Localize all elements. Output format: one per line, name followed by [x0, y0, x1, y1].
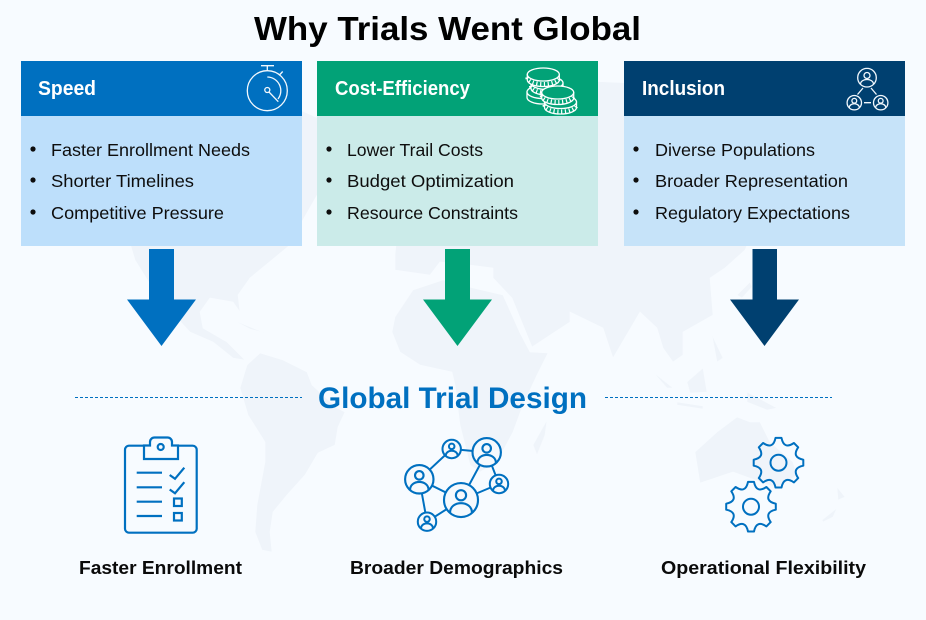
panel: speed: Competitive Pressure	[51, 203, 224, 223]
panel: inclusion: Diverse Populations	[655, 140, 815, 160]
panel: speed: Faster Enrollment Needs	[51, 140, 250, 160]
panel: cost-efficiency	[317, 61, 598, 246]
icon: people network	[405, 438, 508, 531]
panel: speed: Shorter Timelines	[51, 171, 194, 191]
heading: global trial design: Global Trial Design	[318, 382, 587, 415]
panel: inclusion: Regulatory Expectations	[655, 203, 850, 223]
panel: inclusion: Inclusion	[642, 78, 725, 100]
label: faster enrollment: Faster Enrollment	[79, 557, 242, 578]
panel: speed	[21, 61, 302, 246]
arrow: cost-efficiency	[423, 249, 492, 346]
panel: inclusion: Broader Representation	[655, 171, 848, 191]
panel: speed: Speed	[38, 78, 96, 100]
icon: stopwatch	[247, 66, 287, 111]
icon: clipboard checklist	[125, 438, 197, 533]
panel: cost-efficiency: Lower Trail Costs	[347, 140, 483, 160]
panel: inclusion	[624, 61, 905, 246]
label: broader demographics: Broader Demographics	[350, 557, 563, 578]
panel: cost-efficiency: Budget Optimization	[347, 171, 514, 191]
label: operational flexibility: Operational Flexibility	[661, 557, 867, 578]
world map background	[40, 80, 905, 552]
icon: gears	[726, 438, 803, 532]
arrow: inclusion	[730, 249, 799, 346]
icon: coins	[527, 68, 576, 114]
title: Why Trials Went Global	[254, 10, 641, 47]
icon: people triangle	[847, 68, 888, 110]
panel: cost-efficiency: Cost-Efficiency	[335, 78, 471, 100]
arrow: speed	[127, 249, 196, 346]
panel: cost-efficiency: Resource Constraints	[347, 203, 518, 223]
